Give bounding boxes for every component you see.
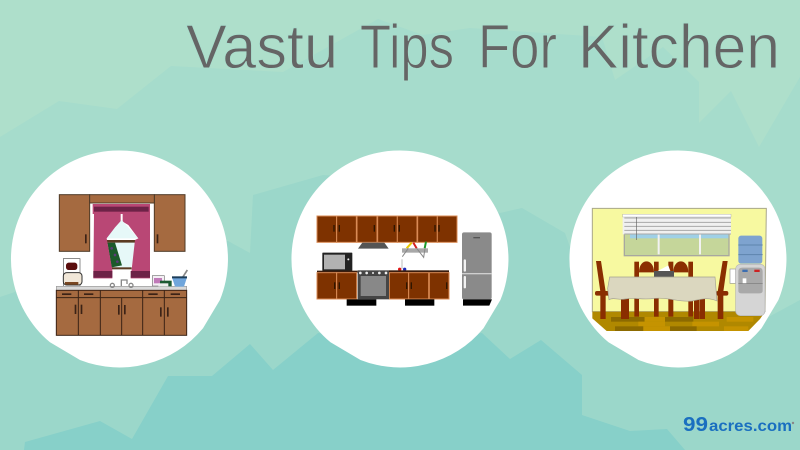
chairs and table legs <box>595 261 728 319</box>
upper cabinets <box>317 216 457 242</box>
tissue box <box>654 265 674 277</box>
countertop <box>56 286 187 290</box>
range hood <box>358 243 389 249</box>
logo: 99acres.com <box>683 413 794 436</box>
base cabinets <box>56 290 187 335</box>
faucet <box>398 259 406 271</box>
water cooler <box>730 236 765 316</box>
window with curtains <box>93 204 150 278</box>
upper cabinets <box>59 195 185 251</box>
microwave <box>322 253 352 271</box>
groceries and mixing bowl <box>152 270 187 287</box>
refrigerator <box>462 232 492 299</box>
panel: dining area <box>569 150 786 367</box>
title: Tips <box>360 13 454 82</box>
wooden floor <box>592 312 765 331</box>
wall <box>592 208 766 312</box>
utensil shelf <box>402 242 428 257</box>
base cabinets <box>317 273 449 299</box>
floor supports <box>347 299 492 306</box>
window with blinds <box>623 214 731 256</box>
table cloth <box>608 277 717 301</box>
coffee maker <box>63 259 82 287</box>
panel: modular kitchen with fridge <box>291 150 508 367</box>
title <box>186 13 780 82</box>
logo: 99acres.com: 99 <box>683 413 708 436</box>
title: For <box>478 13 557 82</box>
title: Kitchen <box>578 13 780 82</box>
title: Vastu <box>186 13 338 82</box>
oven <box>358 270 389 299</box>
countertops <box>317 270 449 273</box>
faucet <box>110 280 133 287</box>
panel: kitchen with window and sink <box>11 150 228 367</box>
logo: 99acres.com: acres.com <box>709 418 792 435</box>
